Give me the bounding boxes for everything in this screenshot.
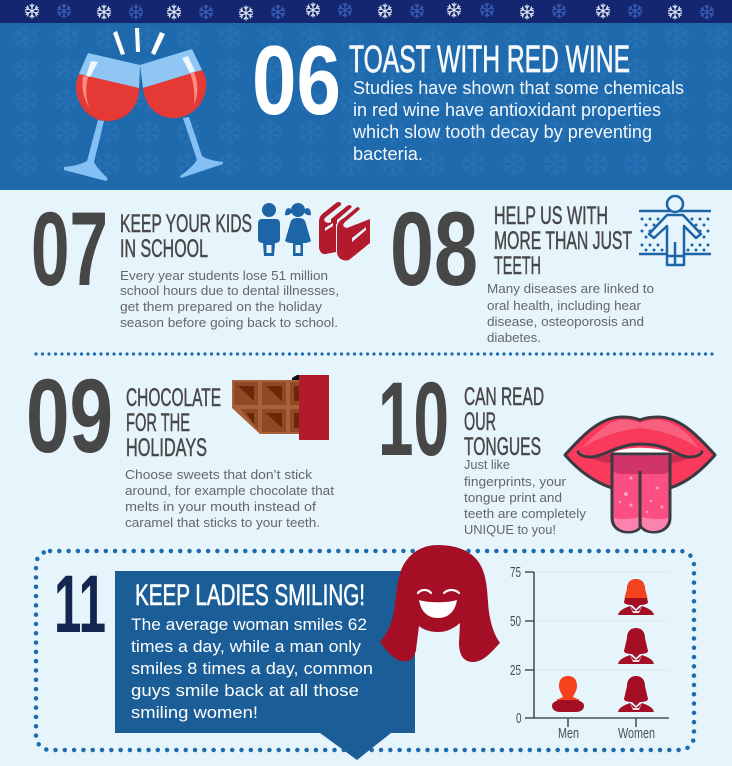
text block — [487, 281, 654, 345]
heading: CAN READ — [464, 383, 544, 411]
text block: Every year students lose 51 million — [120, 268, 328, 283]
heading: KEEP LADIES SMILING! — [135, 579, 365, 612]
text block: wine description — [352, 78, 684, 164]
chart: smiles per day: 75 — [510, 564, 521, 581]
text block: disease, osteoporosis and — [487, 314, 644, 329]
heading: FOR THE — [126, 409, 190, 437]
text block: teeth are completely — [464, 506, 587, 521]
text block: diabetes. — [487, 330, 541, 345]
text block — [120, 268, 339, 330]
icon: clinking wine glasses — [64, 28, 223, 181]
icon: person with dotted field — [639, 196, 711, 265]
text block: around, for example chocolate that — [125, 483, 334, 498]
banner: top snowflake strip — [0, 0, 732, 23]
panel: 11 keep ladies smiling — [36, 545, 694, 760]
panel: 06 toast with red wine — [0, 23, 732, 190]
number 10: 10 — [378, 361, 449, 478]
text block: fingerprints, your — [464, 474, 567, 489]
heading — [120, 210, 252, 263]
text block: caramel that sticks to your teeth. — [125, 515, 320, 530]
heading: MORE THAN JUST — [494, 227, 632, 255]
icon: lips and tongue — [565, 417, 715, 532]
number 09: 09 — [26, 358, 113, 475]
heading — [494, 202, 632, 280]
heading: OUR — [464, 408, 496, 436]
text block: oral health, including hear — [487, 298, 642, 313]
text block: melts in your mouth instead of — [125, 499, 316, 514]
icon: chocolate bar in wrapper — [232, 375, 329, 440]
text block: Many diseases are linked to — [487, 281, 654, 296]
text block: wine description: bacteria. — [353, 144, 423, 164]
chart: smiles per day: 25 — [510, 662, 521, 679]
text block — [464, 457, 587, 537]
text block: get them prepared on the holiday — [120, 299, 323, 314]
text block: The average woman smiles 62 — [131, 615, 367, 634]
text block: tongue print and — [464, 490, 562, 505]
chart: smiles per day: Women — [618, 725, 655, 742]
heading: HOLIDAYS — [126, 434, 207, 462]
icon: man, partly filled — [552, 676, 584, 712]
callout box — [115, 571, 415, 760]
text block: guys smile back at all those — [131, 681, 359, 700]
panel: 09 chocolate for the holidays — [26, 358, 334, 530]
icon: woman, full — [618, 628, 654, 664]
heading: CHOCOLATE — [126, 384, 221, 412]
number 06: 06 — [252, 25, 341, 135]
chart: smiles per day: 50 — [510, 613, 521, 630]
heading: KEEP YOUR KIDS — [120, 210, 252, 238]
chart: smiles per day: 0 — [516, 710, 522, 727]
number 07: 07 — [31, 191, 108, 308]
heading: TONGUES — [464, 433, 541, 461]
text block: smiling women! — [131, 703, 258, 722]
text block: wine description: which slow tooth decay by preventing — [352, 122, 652, 142]
icon: boy and girl — [258, 203, 311, 256]
number 08: 08 — [390, 191, 478, 308]
text block: wine description: Studies have shown that some chemicals — [353, 78, 684, 98]
heading: HELP US WITH — [494, 202, 608, 230]
text block: school hours due to dental illnesses, — [120, 283, 339, 298]
text block: Just like — [464, 457, 510, 472]
text block: smiles 8 times a day, common — [131, 659, 373, 678]
panel: 10 can read our tongues — [378, 361, 715, 537]
text block — [125, 467, 334, 530]
icon: woman, full — [618, 676, 654, 712]
text block: season before going back to school. — [120, 315, 338, 330]
heading — [464, 383, 544, 461]
chart: smiles per day — [510, 564, 669, 742]
text block: UNIQUE to you! — [464, 522, 556, 537]
heading: TEETH — [494, 252, 541, 280]
icon: smiling woman — [380, 545, 500, 662]
number 11: 11 — [54, 559, 106, 650]
text block: wine description: in red wine have antioxidant properties — [353, 100, 661, 120]
text block: Choose sweets that don’t stick — [125, 467, 313, 482]
chart: smiles per day: Men — [558, 725, 579, 742]
text block: times a day, while a man only — [131, 637, 362, 656]
heading — [126, 384, 221, 462]
icon: woman, partly filled — [618, 579, 654, 615]
heading: IN SCHOOL — [120, 235, 208, 263]
text block — [131, 615, 373, 722]
panel: 07 keep your kids in school — [31, 191, 370, 330]
icon: red books — [319, 202, 370, 261]
panel: 08 help us with more than just teeth — [390, 191, 711, 345]
